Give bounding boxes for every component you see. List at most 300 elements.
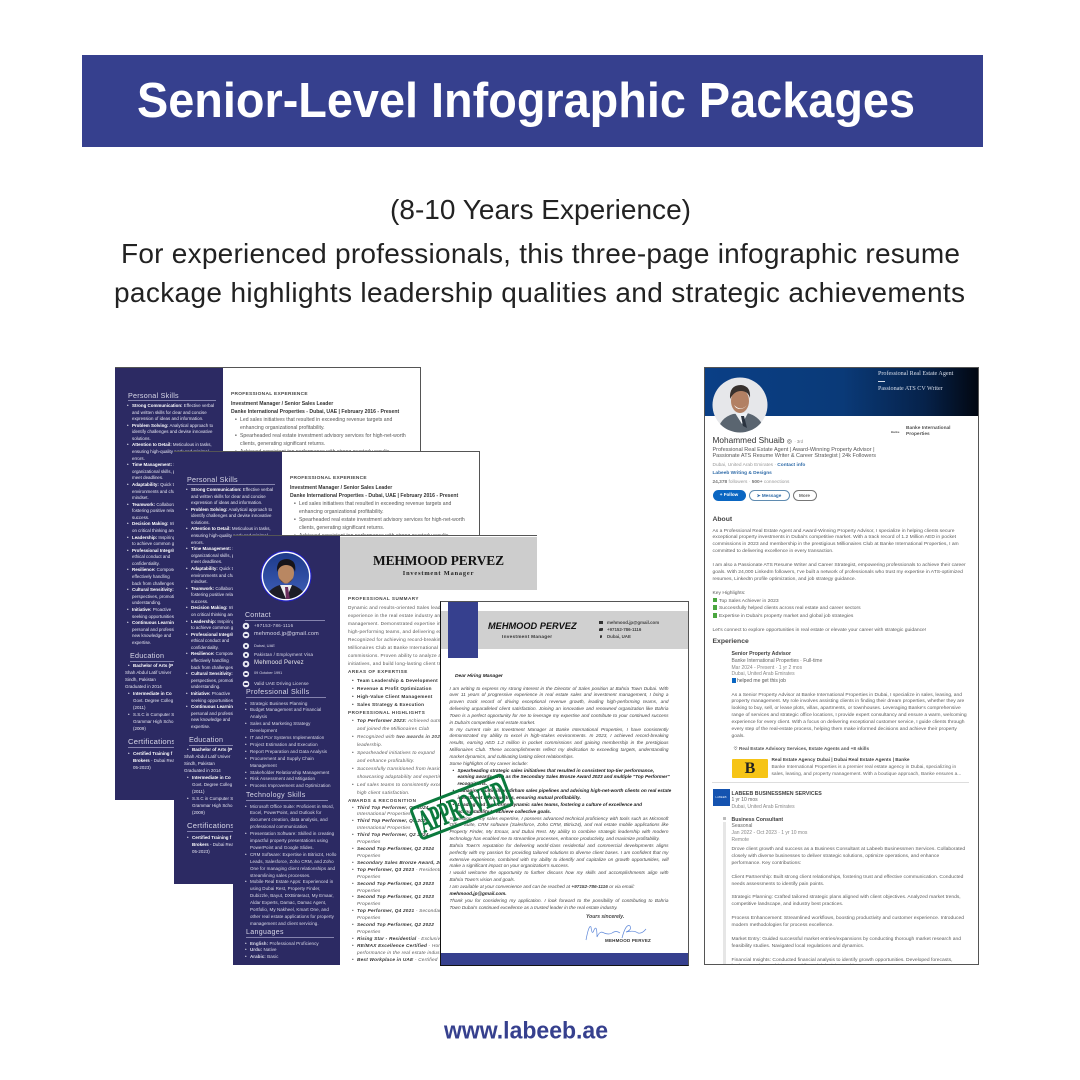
contact details: +97153-786-1116	[254, 623, 293, 628]
resume page 3: Risk Assessment and Mitigation	[250, 776, 315, 781]
first job description: looking to buy, sell, or lease plots, villas, apartments, or townhouses. Leveraging Banke's comprehensive	[732, 706, 961, 711]
resume page 1: Led sales initiatives that resulted in exceeding revenue targets and	[240, 417, 392, 423]
banke card text: sales, leasing, and property management. With a boutique approach, Banke ensures a...	[772, 772, 961, 777]
page 3 main column: AWARDS & RECOGNITION	[348, 798, 416, 803]
page 3 main column: AREAS OF EXPERTISE	[348, 669, 408, 674]
linkedin banner	[705, 368, 980, 416]
resume page 1: Leadership: Inspiring	[132, 535, 175, 540]
page 3 main column: Properties	[357, 839, 381, 844]
second role description: competitive landscape, and industry best practices.	[732, 902, 843, 907]
resume page 2: ethical conduct and	[191, 638, 229, 643]
signature name: MEHMOOD PERVEZ	[605, 938, 651, 943]
first job description: As a Senior Property Advisor at Banke International Properties in Dubai, I specialize in sales, leasing, and	[732, 692, 962, 698]
letter body: earning awards such as the Secondary Sales Bronze Award 2023 and multiple "Top Performer"	[458, 774, 670, 779]
resume page 2: Strong Communication: Effective verbal	[191, 487, 273, 492]
resume page 1: Teamwork: Collaborative,	[132, 502, 183, 507]
resume page 1: success.	[132, 515, 149, 520]
resume page 2: effectively handling	[191, 658, 229, 663]
letter salutation: Dear Hiring Manager	[455, 674, 503, 679]
linkedin buttons	[713, 490, 817, 501]
resume page 2: Danke International Properties - Dubai, UAE | February 2016 - Present	[290, 493, 458, 499]
resume page 2: Adaptability: Quick to adapt	[191, 566, 248, 571]
divider	[712, 781, 969, 784]
resume page 1: Bachelor of Arts (P	[133, 663, 173, 668]
resume page 2: (2009)	[192, 810, 205, 815]
page 3 main column: Third Top Performer, Q2 2024	[357, 832, 429, 837]
letter contact block: mehmood.jp@gmail.com	[607, 620, 659, 625]
resume page 1: Certified Training f	[133, 750, 172, 756]
resume page 3: Sales and Marketing Strategy	[250, 721, 310, 726]
page 3 main column: Secondary Sales Bronze Award, 2023	[357, 860, 448, 865]
letter job title: Investment Manager	[502, 634, 552, 639]
resume page 2: errors.	[191, 540, 204, 545]
resume page 2: ensuring high-quality work and minimal	[191, 533, 268, 538]
resume page 1: ethical conduct and	[132, 554, 170, 559]
resume page 2: Shah Abdul Latif Univer	[184, 754, 230, 759]
page 3 main column: Properties	[357, 915, 381, 920]
page 3 main column: experience in the real estate industry and investment	[348, 613, 469, 618]
page 3 main column: Sales Strategy & Execution	[357, 702, 424, 707]
letter body: Some highlights of my career include:	[450, 761, 528, 766]
resume page 1: Investment Manager / Senior Sales Leader	[231, 401, 333, 407]
resume page 1: S.S.C in Computer S	[133, 712, 174, 717]
letter body: over 11 years of progressive experience in real estate sales and investment management, I bring a	[450, 692, 668, 697]
letter body: Office Suite, CRM software (Salesforce, Zoho CRM, Bitrix24), and real estate mobile applications like	[450, 822, 668, 827]
letter body: Bahria Town's vision and goals.	[450, 877, 515, 882]
second role description: feasibility studies. Navigated local regulations and dynamics.	[732, 944, 864, 949]
resume page 3: Analysis	[250, 714, 267, 719]
letter body: mehmood.jp@gmail.com.	[450, 891, 507, 896]
resume page 2: mindset.	[191, 579, 208, 584]
resume page 1: seeking opportunities	[132, 614, 174, 618]
resume page 1: Decision Making: Informed	[132, 521, 187, 526]
resume page 2: and written skills for clear and concise	[191, 494, 266, 499]
resume page 1: Problem Solving: Analytical approach to	[132, 423, 213, 428]
resume page 2: Graduated in 2014	[184, 768, 221, 773]
banke logo card	[732, 759, 768, 778]
subtitle and description	[114, 194, 965, 308]
linkedin about text: Expertise in Dubai's property market and global job strategies	[719, 614, 853, 619]
page 3 main column: high client satisfaction.	[357, 790, 410, 795]
resume page 3: Mobile Real Estate Apps: Experienced in	[250, 879, 333, 884]
letter closing: Yours sincerely.	[586, 914, 624, 920]
subtitle and description: For experienced professionals, this three-page infographic resume	[121, 238, 960, 269]
second role description	[732, 846, 965, 965]
resume page 3: Budget Management and Financial	[250, 707, 321, 712]
resume page 2: expertise.	[191, 724, 210, 729]
letter body: Property Finder, My Emaar, and Dubai Rest. My ability to combine strategic leadership with modern	[450, 829, 668, 834]
page 3 main column: high-performing teams, and delivering exceptional	[348, 629, 462, 634]
second role header: Remote	[732, 837, 749, 843]
linkedin banner: Passionate ATS CV Writer	[878, 386, 943, 392]
resume page 2: S.S.C in Computer S	[192, 796, 233, 801]
first job header: Mar 2024 - Present · 1 yr 2 mos	[732, 665, 802, 671]
page 3 main column: Recognized for achieving record-breaking AED	[348, 637, 455, 642]
resume page 2: Led sales initiatives that resulted in exceeding revenue targets and	[299, 501, 451, 507]
page 3 main column: PROFESSIONAL HIGHLIGHTS	[348, 710, 425, 715]
linkedin about text: I am also a Passionate ATS Resume Writer and Career Strategist, empowering professionals to achieve their career	[712, 563, 966, 568]
page 3 main column: Revenue & Profit Optimization	[357, 686, 432, 691]
second role description: Financial Insights: Conducted financial analysis to identify growth opportunities. Developed forecasts,	[732, 958, 952, 962]
page 3 main column: Second Top Performer, Q1 2023	[357, 894, 434, 899]
linkedin company: Properties	[906, 432, 930, 437]
second role header: Seasonal	[732, 823, 752, 829]
letter body: investment opportunities, ensuring mutual profitability.	[458, 795, 581, 800]
second company header: Dubai, United Arab Emirates	[732, 804, 795, 810]
resume page 3: CRM Software: Expertise in Bitrix24, Hollo	[250, 852, 336, 857]
second role description: needs assessments to identify pain points.	[732, 882, 824, 887]
resume page 3: Arabic: Basic	[250, 954, 278, 959]
resume page 3: impactful property presentations using	[250, 838, 328, 843]
page 3 header band: Investment Manager	[403, 570, 474, 577]
resume page 3: Development	[250, 728, 277, 733]
resume page 1: Education	[130, 651, 164, 660]
contact details: 09 October 1991	[254, 670, 282, 674]
resume page 1: meet deadlines.	[132, 475, 163, 480]
resume page 3: Languages	[246, 929, 284, 936]
page 3 main column: Third Top Performer, Q3 2024	[357, 804, 429, 810]
second role description: closely with diverse businesses to deliver strategic solutions, optimize operations, and enhance	[732, 854, 939, 859]
page 3 main column: PROFESSIONAL SUMMARY	[348, 596, 419, 601]
linkedin about text: committed to delivering excellence in every transaction.	[712, 549, 834, 554]
resume page 2: expression of ideas and information.	[191, 500, 262, 505]
page 3 main column: Rising Star - Residential - Exclusive	[357, 936, 443, 941]
banke card text: Real Estate Agency Dubai | Dubai Real Estate Agents | Banke	[772, 758, 910, 763]
letter body: technology has enabled me to streamline processes, enhance productivity, and maximize profitability.	[450, 836, 660, 841]
letter header band	[441, 611, 689, 649]
resume page 1	[115, 367, 421, 800]
letter body: Leading and mentoring dynamic sales teams, fostering a culture of excellence and	[458, 802, 642, 807]
page 3 main column: and enhance profitability.	[357, 758, 414, 763]
second role header	[732, 816, 808, 843]
letter footer bar	[441, 953, 689, 966]
letter body: In addition to my sales expertise, I possess advanced technical proficiency with tools such as Microsoft	[450, 816, 668, 821]
subtitle and description: (8-10 Years Experience)	[390, 194, 691, 225]
resume page 1: PROFESSIONAL EXPERIENCE	[231, 392, 308, 397]
linkedin about text: resumes, LinkedIn profile optimization, and job strategy guidance.	[712, 577, 856, 582]
second role header: Jan 2022 - Oct 2023 · 1 yr 10 mos	[732, 830, 807, 836]
title text: Senior-Level Infographic Packages	[137, 74, 915, 128]
second company header	[732, 790, 822, 810]
letter body: delivering unparalleled client satisfaction. Joining an innovative and renowned organization like Bahria	[450, 706, 668, 711]
resume page 3: PowerPoint and Google Slides.	[250, 845, 314, 850]
resume page 2: Continuous Learning:	[191, 704, 237, 709]
linkedin about text: Key Highlights:	[712, 591, 745, 596]
resume page 3: Strategic Business Planning	[250, 700, 307, 706]
second company header: LABEEB BUSINESSMEN SERVICES	[732, 790, 822, 796]
linkedin buttons: + Follow	[720, 492, 738, 496]
resume page 1: mindset.	[132, 495, 149, 500]
resume page 1: fostering positive relations	[132, 508, 183, 513]
resume page 3: Urdu: Native	[250, 947, 277, 952]
page 3 main column: Recognized with two awards in 2023	[357, 734, 443, 739]
linkedin headline	[712, 446, 876, 459]
resume page 1: (2011)	[133, 705, 146, 710]
page 3 main column: and joined the Millionaires Club	[357, 726, 429, 731]
page 3 main column: Properties	[357, 901, 381, 906]
letter body: make a significant impact on your organization's success.	[450, 863, 569, 868]
page 3 main column	[348, 596, 494, 962]
resume page 2: Brokers - Dubai Rea	[192, 842, 234, 846]
page 3 main column: Dynamic and results-oriented Sales leader with over 11 years of	[348, 605, 494, 610]
linkedin about text: goals. With 24,000 LinkedIn followers, I've built a network of professionals who trust my expertise in ATS-optimized	[712, 570, 963, 575]
letter contact block: +97152-786-1116	[607, 627, 641, 632]
contact details	[254, 623, 319, 686]
page 3 main column: Third Top Performer, Q1 2024	[357, 818, 429, 823]
resume page 1: personal and professional	[132, 627, 183, 632]
resume page 2: Professional Integrity:	[191, 632, 238, 637]
page 3 main column: Successfully transitioned from leasing	[357, 766, 444, 771]
resume page 3: document creation, data analysis, and	[250, 817, 328, 822]
linkedin meta: Labeeb Writing & Designs	[712, 471, 772, 476]
resume page 2: solutions.	[191, 520, 210, 525]
resume page 2: PROFESSIONAL EXPERIENCE	[290, 476, 367, 481]
page 3 main column: Spearheaded initiatives to expand	[357, 750, 435, 755]
letter body: Thank you for considering my application. I look forward to the possibility of contributing to Bahria	[450, 898, 668, 903]
resume page 1: Sindh, Pakistan	[125, 677, 156, 682]
page 3 main column: RE/MAX Excellence Certified - Honored	[357, 943, 451, 948]
resume page 2: Certifications	[187, 820, 234, 830]
contact details: Mehmood Pervez	[254, 660, 304, 666]
resume page 3: Process Improvement and Optimization	[250, 783, 331, 788]
first job description: every step of the real-estate process, helping them make informed decisions and achieve their property	[732, 727, 957, 732]
resume page 1: Time Management: Strong	[132, 462, 186, 467]
title banner	[82, 55, 983, 147]
resume page 3: One for managing client relationships and	[250, 866, 335, 871]
contact details: Valid UAE Driving License	[254, 680, 309, 686]
resume page 2: fostering positive relations	[191, 592, 242, 597]
page 3 main column: commissions. Proven ability to analyze and drive	[348, 653, 460, 658]
page 3 main column: International Properties	[357, 825, 411, 830]
resume page 1: Cultural Sensitivity:	[132, 587, 174, 592]
resume page 1: Shah Abdul Latif Univer	[125, 670, 171, 675]
letter body: results, earning AED 1.2 million in pocket commissions and gaining membership in the prestigious	[450, 740, 668, 745]
letter contact block: Dubai, UAE	[607, 634, 631, 639]
linkedin about text: Top Sales Achiever in 2023	[719, 599, 779, 604]
resume page 2: Bachelor of Arts (P	[192, 747, 232, 752]
page 3 main column: Second Top Performer, Q2 2022	[357, 922, 434, 927]
letter body: in Dubai's competitive real estate market.	[450, 720, 535, 725]
resume page 2: clients, generating significant returns.	[299, 525, 384, 531]
letter body: I am writing to express my strong interest in the Director of Sales position at Bahria Town Dubai. With	[450, 686, 668, 690]
resume page 2: identify challenges and devise innovative	[191, 513, 271, 518]
linkedin buttons: ➤ Message	[757, 492, 781, 498]
banke card text	[772, 758, 961, 777]
resume page 3: Contact	[245, 612, 271, 619]
linkedin about text: commissions in 2023 and membership in the prestigious Millionaires Club at Banke International Properties, I am	[712, 542, 959, 547]
page 3 main column: Properties	[357, 888, 381, 893]
resume page 1: enhancing organizational profitability.	[240, 425, 325, 431]
resume page 2: Intermediate in Co	[192, 775, 231, 780]
first job description	[732, 692, 967, 739]
letter body: extensive experience, combined with my ability to identify and capitalize on growth opportunities, will	[450, 857, 668, 862]
resume page 1: Graduated in 2014	[125, 684, 162, 689]
resume page 1: Achieved consistent top performance with strong quarterly results	[240, 449, 389, 455]
resume page 1: errors.	[132, 456, 145, 461]
linkedin headline: Passionate ATS Resume Writer & Career Strategist | 24k Followers	[712, 453, 876, 459]
linkedin meta: 24,378 followers · 500+ connections	[712, 480, 789, 485]
linkedin name: Mohammed Shuaib ◎ · 3rd	[712, 435, 803, 445]
contact details: Pakistan / Employment Visa	[254, 652, 313, 657]
page 3 main column: Best Workplace in UAE - Certified	[357, 957, 438, 962]
resume page 2: confidentiality.	[191, 645, 219, 650]
page 3 main column: leadership.	[357, 742, 382, 747]
resume page 1: Resilience: Composed	[132, 567, 178, 572]
letter body: perfectly with my passion for providing tailored solutions to diverse client bases. I am confident that my	[450, 850, 668, 855]
page 3 main column: showcasing adaptability and expertise	[357, 774, 444, 779]
linkedin company	[891, 426, 951, 437]
resume page 3	[233, 535, 537, 965]
resume page 3: other real estate applications for property	[250, 914, 334, 919]
resume page 2: meet deadlines.	[191, 559, 222, 564]
linkedin about heading: About	[712, 516, 732, 523]
linkedin about text	[712, 528, 966, 633]
resume page 2: Initiative: Proactive	[191, 691, 230, 696]
resume page 1: effectively handling	[132, 574, 170, 579]
first job description: experience for every client. With a focus on delivering exceptional customer service, I guide clients through	[732, 720, 965, 725]
resume page 2: Investment Manager / Senior Sales Leader	[290, 485, 392, 491]
contact details: mehmood.jp@gmail.com	[254, 630, 319, 636]
resume page 2	[174, 451, 480, 884]
resume page 3: professional communication.	[250, 824, 308, 829]
letter body: Spearheading strategic sales initiatives that resulted in consistent top-tier performance,	[458, 768, 654, 773]
resume page 3: Aldar Experts, Damac, Damac Agent,	[250, 900, 326, 905]
letter body: Millionaires Club. These accomplishments reflect my dedication to exceeding targets, understanding	[450, 747, 668, 752]
letter body: Managing multimillion-dirham sales pipelines and advising high-net-worth clients on real estate	[458, 788, 671, 793]
resume page 3: management and client servicing.	[250, 921, 319, 926]
resume page 1: Strong Communication: Effective verbal	[132, 403, 214, 408]
cover letter page 4	[440, 601, 689, 966]
first job header: Banke International Properties · Full-time	[732, 658, 822, 664]
resume page 1: and written skills for clear and concise	[132, 410, 207, 415]
resume page 1: Govt. Degree Colleg	[133, 698, 173, 703]
first job header: Senior Property Advisor	[732, 651, 791, 657]
resume page 1: environments and changing	[132, 489, 187, 494]
linkedin avatar	[712, 378, 768, 432]
resume page 2: Resilience: Composed	[191, 651, 237, 656]
resume page 3: Excel, PowerPoint, and Outlook for	[250, 810, 322, 815]
portrait photo	[260, 550, 312, 602]
resume page 2: Grammar High Scho	[192, 803, 232, 808]
second role description: Strategic Planning: Crafted tailored strategic plans aligned with client objectives. Analyzed market trends,	[732, 895, 961, 900]
page 3 header band	[340, 537, 537, 590]
letter body: recognitions.	[458, 781, 487, 786]
resume page 3: using Dubai Rest, Property Finder,	[250, 886, 320, 891]
first job header: helped me get this job	[737, 678, 786, 684]
resume page 1: understanding.	[132, 600, 161, 605]
resume page 1: Personal Skills	[128, 390, 179, 400]
resume page 1: Adaptability: Quick to adapt	[132, 482, 189, 487]
letter body: Town is a perfect opportunity for me to leverage my expertise and contribute to your continued success	[450, 713, 668, 718]
resume page 1: back from challenges	[132, 581, 174, 586]
resume page 1: Danke International Properties - Dubai, UAE | February 2016 - Present	[231, 409, 399, 415]
linkedin headline: Professional Real Estate Agent | Award-Winning Property Advisor |	[712, 446, 875, 452]
first job header: Dubai, United Arab Emirates	[732, 671, 795, 677]
letter contact block	[599, 620, 659, 639]
resume page 3: Technology Skills	[246, 792, 306, 799]
page 3 main column: Second Top Performer, Q3 2023	[357, 881, 434, 886]
second role description: Process Enhancement: Streamlined workflows, boosting productivity and customer experience. Introduced	[732, 916, 964, 921]
signature	[586, 925, 646, 940]
resume page 2: Attention to Detail: Meticulous in tasks,	[191, 526, 271, 531]
linkedin experience heading: Experience	[712, 638, 749, 645]
resume page 2: seeking opportunities	[191, 698, 233, 702]
resume page 1: 05-2023)	[133, 764, 151, 770]
linkedin banner: Professional Real Estate Agent	[878, 371, 953, 377]
resume page 2: Teamwork: Collaborative,	[191, 586, 242, 591]
resume page 1: solutions.	[132, 436, 151, 441]
resume page 3: Project Estimation and Execution	[250, 742, 318, 747]
page 3 main column: performance in the real estate industry	[357, 950, 446, 955]
resume page 1: Grammar High Scho	[133, 719, 173, 724]
website footer: www.labeeb.ae	[443, 1018, 608, 1044]
letter body: Bahria Town's reputation for delivering world-class residential and commercial developments aligns	[450, 843, 668, 848]
resume page 3: Microsoft Office Suite: Proficient in Word,	[250, 804, 334, 808]
labeeb logo	[712, 789, 730, 806]
resume page 1: identify challenges and devise innovative	[132, 429, 212, 434]
resume page 3: Report Preparation and Data Analysis	[250, 749, 327, 754]
page 3 header band: MEHMOOD PERVEZ	[373, 553, 504, 568]
resume page 1: (2009)	[133, 726, 146, 731]
page 3 main column: High-Value Client Management	[357, 694, 432, 699]
page 3 main column: Millionaires Club at Banke International Properties	[348, 645, 463, 650]
resume page 2: back from challenges	[191, 665, 233, 670]
resume page 1: Brokers - Dubai Rea	[133, 758, 175, 762]
resume page 2: Spearheaded real estate investment advisory services for high-net-worth	[299, 517, 465, 523]
second role description: Drove client growth and success as a Business Consultant at Labeeb Businessmen Services. Collaborated	[732, 847, 965, 852]
resume page 1: clients, generating significant returns.	[240, 441, 325, 447]
letter body: In my current role as Investment Manager at Banke International Properties, I have consistently	[450, 727, 668, 732]
contact details: Dubai, UAE	[254, 642, 275, 648]
second role description: Client Partnership: Built strong client relationships, fostering trust and effective communication. Conducted	[732, 875, 963, 880]
linkedin about text: Let's connect to explore opportunities in real estate or elevate your career with strategic guidance!	[712, 628, 926, 633]
resume page 1: new knowledge and	[132, 633, 171, 638]
blue tab	[448, 602, 478, 658]
linkedin company: Banke International	[906, 426, 951, 431]
second role description: performance. Key contributions:	[732, 861, 801, 866]
resume page 3: streamlining sales processes.	[250, 873, 310, 878]
linkedin buttons: More	[799, 492, 810, 498]
linkedin profile panel	[704, 367, 979, 965]
resume page 3: English: Professional Proficiency	[250, 940, 319, 946]
resume page 2: success.	[191, 599, 208, 604]
resume page 1: expression of ideas and information.	[132, 416, 203, 421]
page 3 main column: Second Top Performer, Q2 2024	[357, 846, 434, 851]
letter body	[449, 686, 672, 910]
resume page 1: confidentiality.	[132, 561, 160, 566]
first job description: range of services and strategic office locations, I provide expert consultancy and ensure a warm, welcoming	[732, 713, 967, 718]
page 3 main column: Led sales teams to consistently exceed	[357, 782, 447, 787]
linkedin about text: Successfully helped clients across real estate and career sectors	[719, 606, 861, 611]
resume page 3: Professional Skills	[246, 689, 309, 696]
resume page 3: Portfolio, My Nakheel, Kmart One, and	[250, 907, 329, 912]
resume page 2: Achieved consistent top performance with strong quarterly results	[299, 533, 448, 539]
contact icons	[242, 622, 250, 688]
subtitle and description: package highlights leadership qualities and strategic achievements	[114, 277, 965, 308]
resume page 2: (2011)	[192, 789, 204, 794]
resume page 1: organizational skills, prioritizing	[132, 469, 193, 474]
resume page 3: Procurement and Supply Chain	[250, 756, 314, 761]
resume page 2: Education	[189, 735, 223, 744]
resume page 1: on critical thinking and	[132, 528, 176, 533]
resume page 1: Intermediate in Co	[133, 691, 172, 696]
letter body: I would welcome the opportunity to further discuss how my skills and accomplishments align with	[450, 870, 668, 875]
linkedin meta	[712, 462, 806, 485]
page 3 main column: initiatives, and build long-lasting client trust.	[348, 661, 449, 666]
banke logo card: B	[745, 760, 755, 777]
linkedin company: Banke	[891, 430, 899, 434]
resume page 3: Stakeholder Relationship Management	[250, 770, 329, 775]
